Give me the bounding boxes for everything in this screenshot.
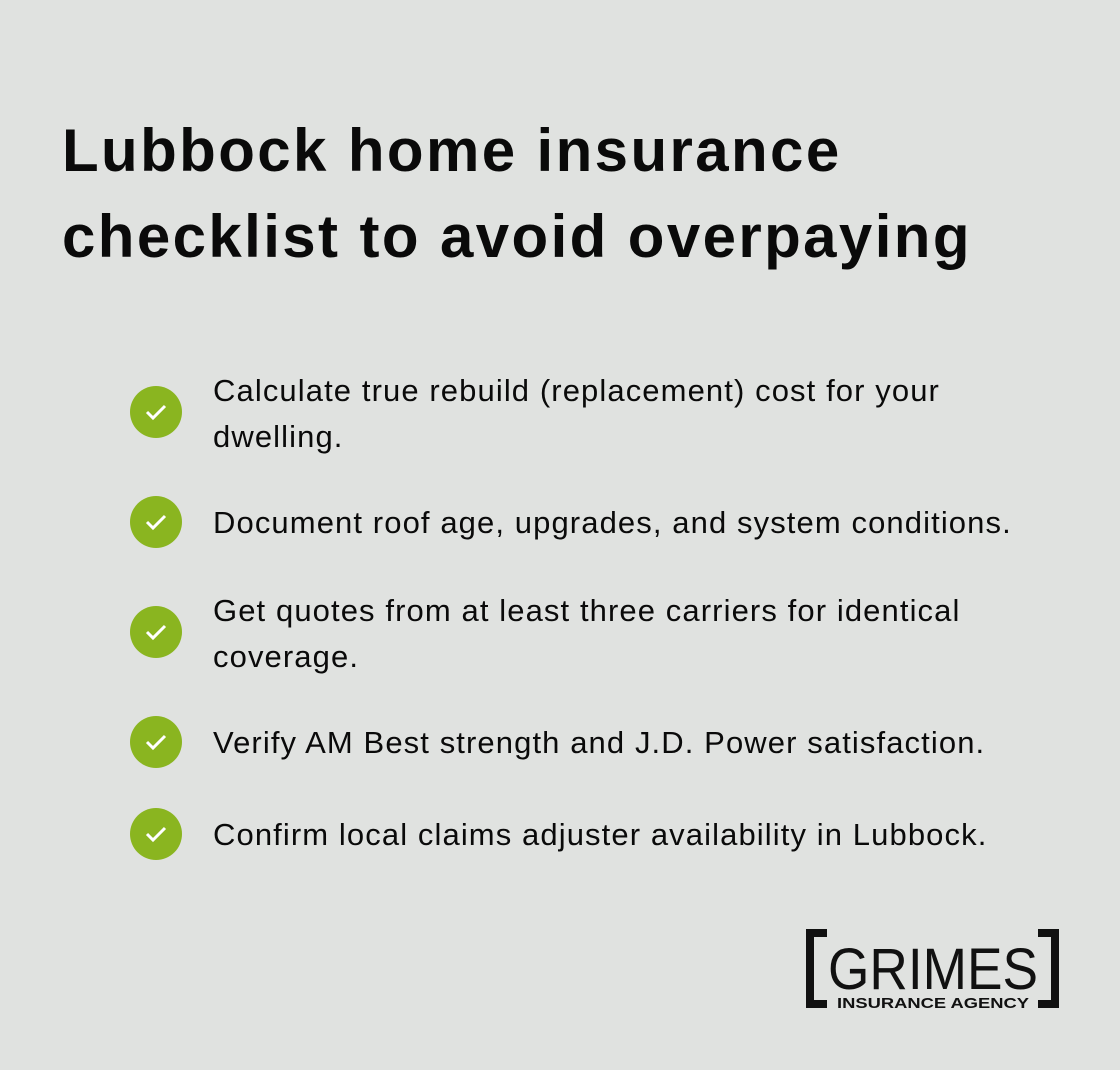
title — [62, 117, 972, 270]
icon: check — [130, 716, 182, 768]
icon: check — [130, 808, 182, 860]
title: Lubbock home insurance — [62, 117, 842, 184]
text: Confirm local claims adjuster availability in Lubbock. — [213, 817, 987, 852]
logo: INSURANCE AGENCY — [837, 995, 1029, 1012]
checklist item 3 — [130, 593, 960, 674]
text: coverage. — [213, 639, 359, 674]
checklist item 5 — [130, 808, 987, 860]
checklist item 4 — [130, 716, 985, 768]
text — [213, 373, 940, 454]
text: Calculate true rebuild (replacement) cost for your — [213, 373, 940, 408]
checklist item 1 — [130, 373, 940, 454]
text: dwelling. — [213, 419, 344, 454]
title: checklist to avoid overpaying — [62, 203, 972, 270]
logo: GRIMES — [828, 937, 1038, 1002]
text: Verify AM Best strength and J.D. Power satisfaction. — [213, 725, 985, 760]
icon: check — [130, 606, 182, 658]
icon: check — [130, 496, 182, 548]
text: Get quotes from at least three carriers for identical — [213, 593, 960, 628]
text — [213, 593, 960, 674]
text: Document roof age, upgrades, and system conditions. — [213, 505, 1012, 540]
checklist item 2 — [130, 496, 1012, 548]
icon: check — [130, 386, 182, 438]
